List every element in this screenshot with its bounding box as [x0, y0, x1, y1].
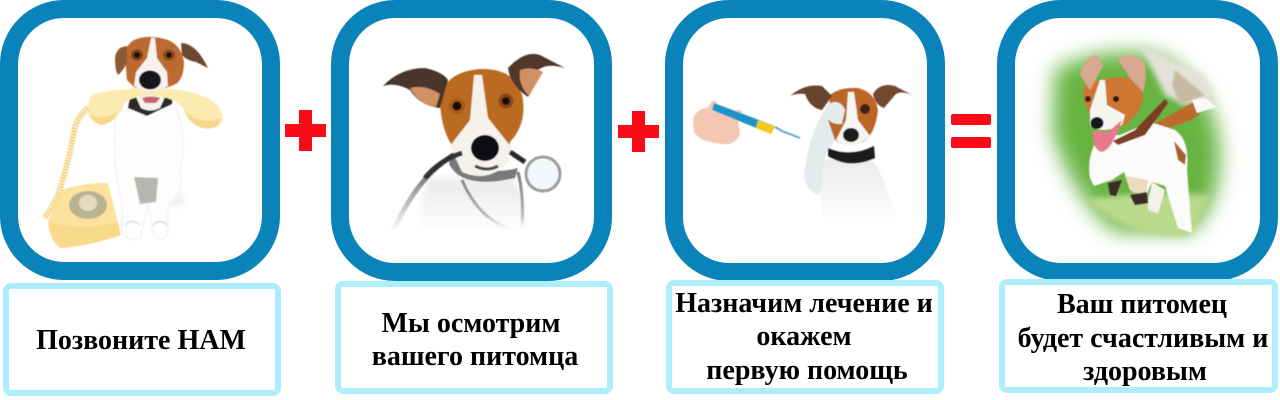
dog head — [125, 37, 184, 88]
dog body — [819, 155, 896, 228]
tail — [1155, 101, 1200, 128]
frame 1 — [9, 9, 271, 271]
caption 4: будет счастливым и — [1018, 323, 1268, 354]
caption 4: Ваш питомец — [1057, 289, 1227, 320]
dog head — [828, 88, 878, 145]
illustration: dog with telephone — [44, 37, 223, 248]
rotary phone — [48, 183, 121, 248]
raised paw — [804, 102, 845, 195]
caption 3 — [669, 283, 941, 391]
cord — [44, 108, 88, 218]
panel: step 4 happy — [1006, 9, 1269, 272]
stethoscope — [510, 152, 525, 162]
ears — [115, 46, 127, 75]
dog head — [1083, 77, 1143, 129]
telephone handset — [88, 88, 223, 129]
ears — [1080, 55, 1103, 90]
caption 1 — [6, 286, 278, 393]
ears — [383, 68, 448, 108]
ears — [790, 85, 832, 110]
caption 4: здоровым — [1083, 356, 1207, 387]
frame 4 — [1006, 9, 1269, 272]
tongue — [1093, 120, 1122, 152]
illustration: dog with stethoscope — [383, 54, 565, 232]
illustration: hand with syringe and dog — [693, 85, 912, 228]
caption 1: Позвоните НАМ — [36, 325, 246, 356]
caption 2: вашего питомца — [372, 341, 578, 372]
body — [1089, 122, 1192, 233]
illustration: running dog on grass — [1052, 45, 1220, 236]
plus sign 1 — [285, 110, 326, 151]
caption 3: Назначим лечение и — [675, 288, 933, 319]
collar — [1113, 99, 1168, 145]
frame 3 — [674, 9, 936, 272]
panel: step 1 call — [9, 9, 271, 271]
plus sign 2 — [618, 111, 659, 152]
panel: step 3 treat — [674, 9, 936, 272]
caption 2 — [338, 284, 610, 391]
frame 2 — [340, 9, 603, 272]
panel: step 2 examine — [340, 9, 603, 272]
equals sign — [951, 114, 991, 148]
caption 3: первую помощь — [706, 355, 908, 386]
hand — [693, 101, 742, 144]
dog head — [440, 69, 523, 174]
caption 3: окажем — [756, 321, 852, 352]
collar — [828, 146, 875, 164]
caption 2: Мы осмотрим — [382, 308, 560, 339]
syringe — [712, 103, 775, 134]
paws — [1108, 180, 1122, 196]
caption 4 — [1002, 282, 1275, 390]
